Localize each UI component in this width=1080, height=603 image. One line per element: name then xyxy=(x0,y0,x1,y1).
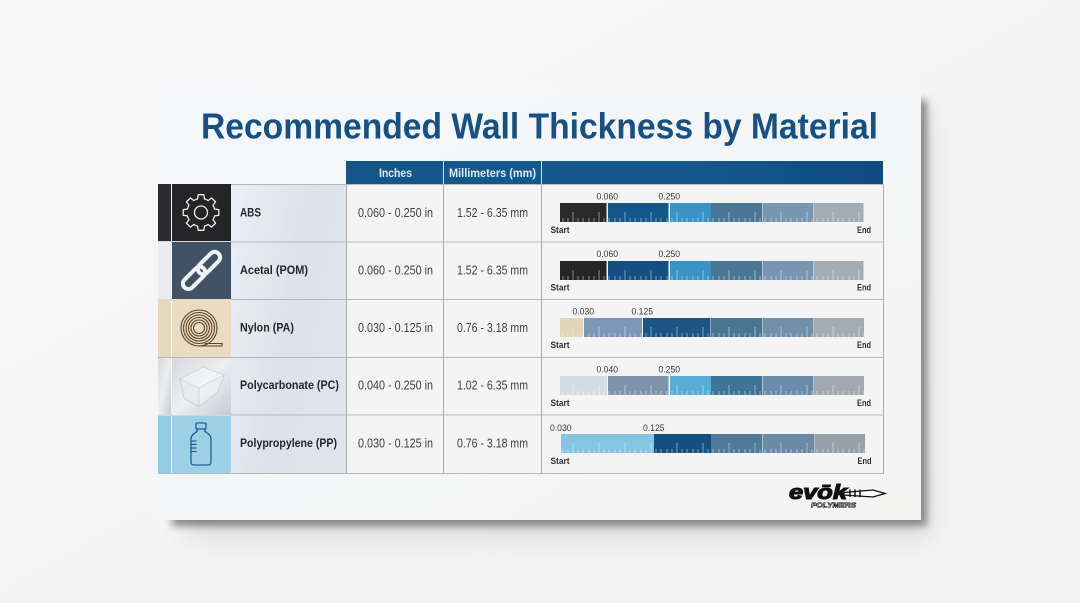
card shadow xyxy=(172,100,930,538)
row: Polypropylene xyxy=(158,416,231,473)
Polycarbonate values xyxy=(240,378,528,392)
Polypropylene range bar xyxy=(550,423,872,467)
Nylon range bar: 0.030 xyxy=(572,306,594,318)
Acetal range bar: 0.250 xyxy=(658,249,680,260)
icon: gear xyxy=(183,195,219,230)
Nylon range bar: 0.125 xyxy=(632,306,653,318)
icon: chain link xyxy=(181,250,222,291)
card xyxy=(158,82,921,520)
table body cells xyxy=(158,184,884,474)
table header xyxy=(346,161,883,184)
ABS values: ABS xyxy=(240,206,261,220)
row: Acetal xyxy=(158,242,231,299)
row: Nylon xyxy=(158,299,231,357)
Acetal values: 0.060 - 0.250 in xyxy=(358,264,433,278)
Polycarbonate values: 1.02 - 6.35 mm xyxy=(457,378,528,392)
ABS values: 0.060 - 0.250 in xyxy=(358,206,433,220)
Acetal range bar: Start xyxy=(550,282,570,294)
Nylon range bar: Start xyxy=(550,340,570,351)
title: Recommended Wall Thickness by Material xyxy=(201,106,878,146)
ABS range bar xyxy=(550,192,871,236)
Polycarbonate values: 0.040 - 0.250 in xyxy=(358,378,433,392)
ABS range bar: End xyxy=(857,225,871,236)
Nylon values: Nylon (PA) xyxy=(240,320,294,334)
ABS range bar: 0.250 xyxy=(658,192,680,202)
ABS values: 1.52 - 6.35 mm xyxy=(457,206,528,220)
Polycarbonate range bar: Start xyxy=(550,398,570,409)
Polypropylene range bar: End xyxy=(858,456,872,467)
Acetal values: Acetal (POM) xyxy=(240,263,308,277)
Polypropylene values: 0.030 - 0.125 in xyxy=(358,436,433,450)
header: millimeters: Millimeters (mm) xyxy=(449,166,536,180)
Polypropylene values xyxy=(240,436,528,450)
Polycarbonate range bar: 0.250 xyxy=(658,364,680,376)
Acetal range bar: 0.060 xyxy=(596,249,618,260)
Polypropylene values: 0.76 - 3.18 mm xyxy=(457,436,528,450)
Acetal values xyxy=(240,263,528,278)
Nylon range bar: End xyxy=(857,340,871,351)
header: inches: Inches xyxy=(379,166,412,180)
icon: coil xyxy=(181,310,222,346)
logo: evok polymers: evōk xyxy=(789,482,848,504)
Acetal range bar xyxy=(550,249,871,294)
Polypropylene values: Polypropylene (PP) xyxy=(240,436,337,450)
Polypropylene range bar: Start xyxy=(550,456,570,467)
ABS range bar: Start xyxy=(550,225,570,236)
Polycarbonate range bar xyxy=(550,364,871,409)
Nylon values: 0.030 - 0.125 in xyxy=(358,321,433,335)
ABS range bar: 0.060 xyxy=(596,192,618,202)
Polycarbonate range bar: 0.040 xyxy=(596,364,618,376)
Polycarbonate range bar: End xyxy=(857,398,871,409)
logo: evok polymers xyxy=(789,482,885,510)
icon: bottle xyxy=(191,423,211,465)
Nylon values xyxy=(240,320,528,335)
row: ABS xyxy=(158,184,231,241)
icon: clear crystal block xyxy=(180,367,224,407)
Polypropylene range bar: 0.030 xyxy=(550,423,572,434)
Polycarbonate values: Polycarbonate (PC) xyxy=(240,378,339,392)
logo: evok polymers: POLYMERS xyxy=(811,500,856,510)
Acetal values: 1.52 - 6.35 mm xyxy=(457,264,528,278)
Nylon values: 0.76 - 3.18 mm xyxy=(457,321,528,335)
Polypropylene range bar: 0.125 xyxy=(643,423,664,434)
ABS values xyxy=(240,206,528,220)
row: Polycarbonate xyxy=(158,358,231,415)
Nylon range bar xyxy=(550,306,871,351)
Acetal range bar: End xyxy=(857,282,871,294)
